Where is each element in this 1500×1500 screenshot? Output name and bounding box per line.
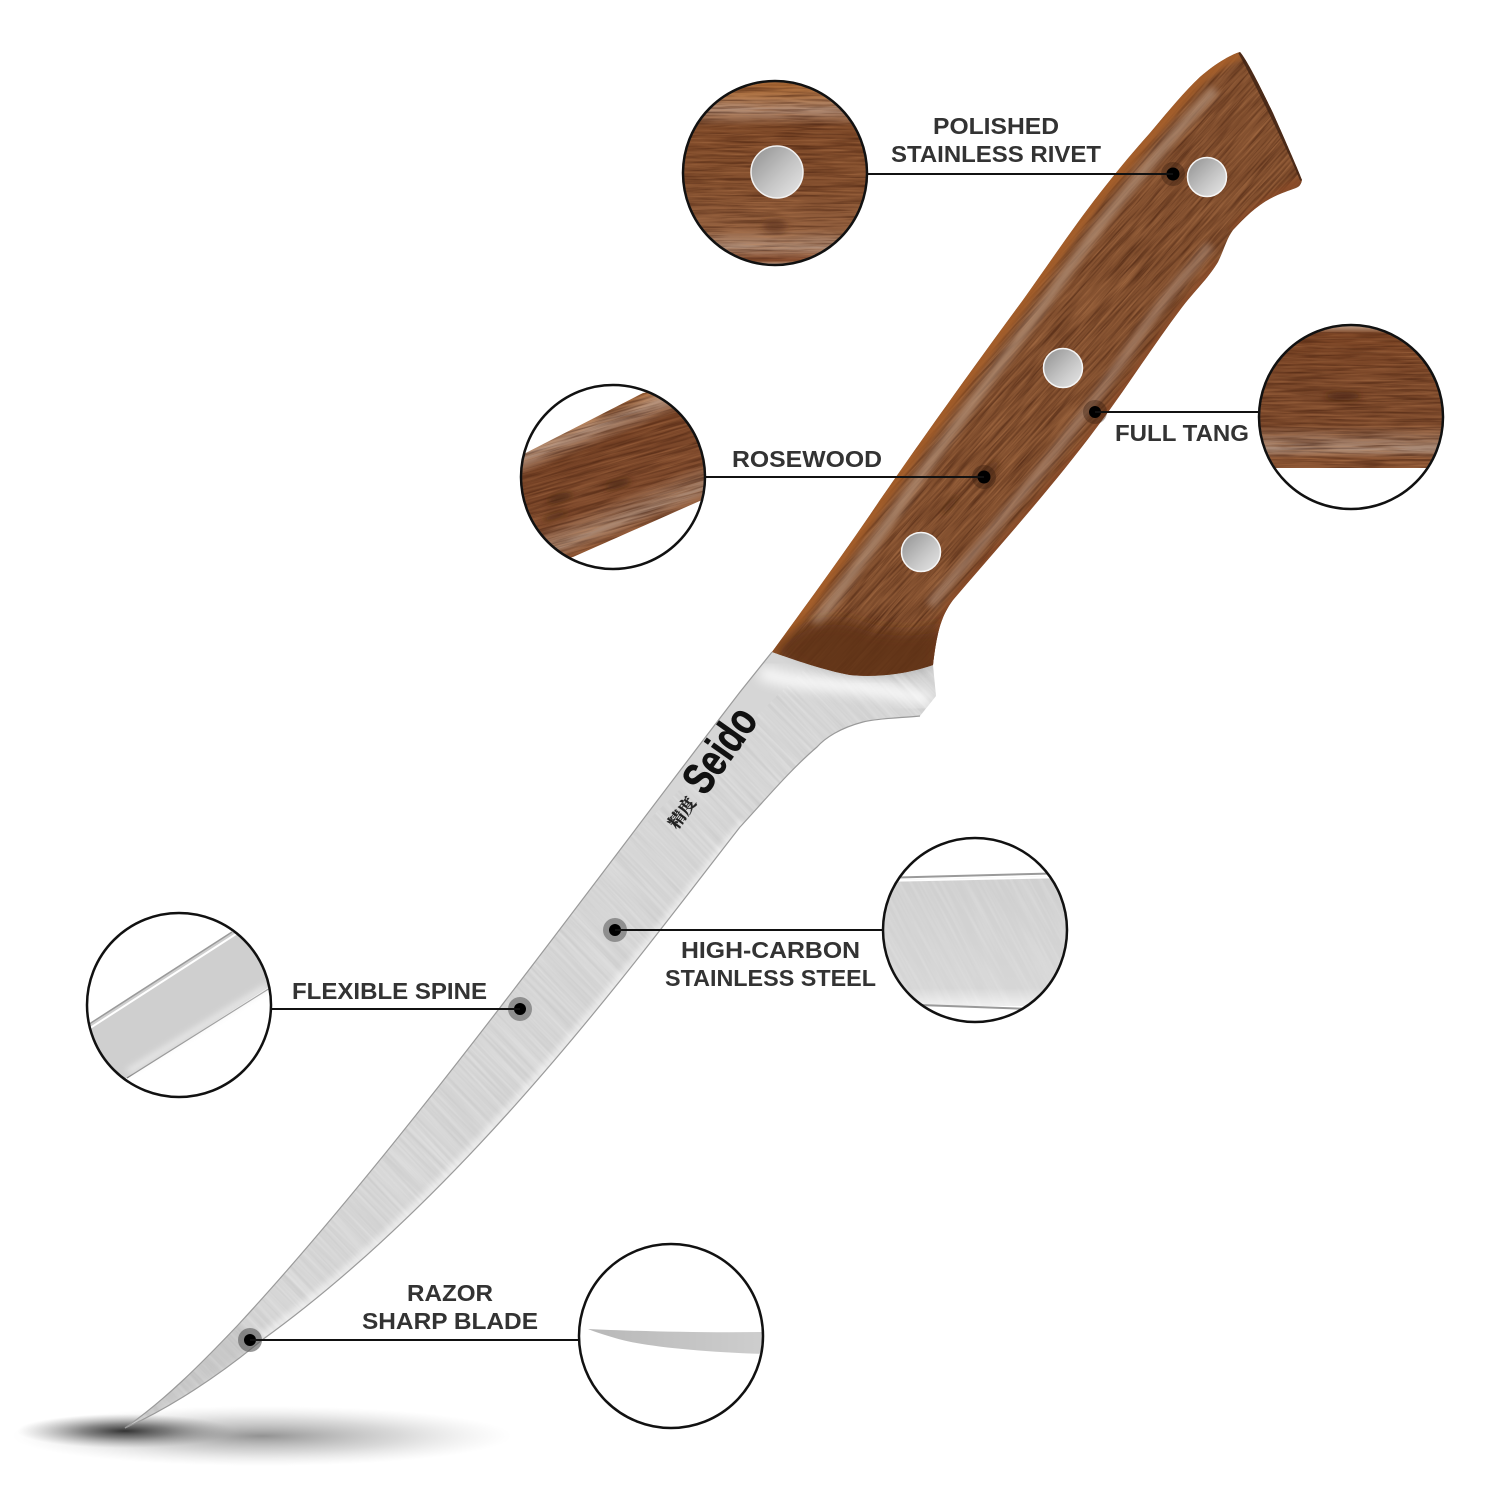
leader line and marker — [868, 162, 1185, 186]
rivet bottom — [902, 532, 940, 572]
detail circle — [579, 1244, 765, 1428]
leader line and marker — [706, 465, 996, 489]
callout: razor sharp blade — [238, 1244, 765, 1428]
brand logo: Seido — [672, 697, 767, 803]
label — [362, 1280, 538, 1334]
label: FULL TANG — [1115, 420, 1249, 446]
handle — [772, 52, 1302, 676]
leader line and marker — [603, 918, 885, 942]
brand logo — [661, 697, 767, 833]
label: STAINLESS STEEL — [665, 965, 876, 991]
detail circle — [680, 80, 870, 266]
rivet middle — [1044, 348, 1082, 388]
label: POLISHED — [933, 113, 1059, 139]
blade — [124, 652, 936, 1428]
label: RAZOR — [407, 1280, 493, 1306]
detail circle — [80, 913, 280, 1097]
label: ROSEWOOD — [732, 446, 882, 472]
leader line and marker — [1083, 400, 1260, 424]
detail circle — [520, 384, 706, 570]
label — [891, 113, 1102, 167]
label: SHARP BLADE — [362, 1308, 538, 1334]
callout: polished stainless rivet — [680, 80, 1185, 266]
label — [665, 937, 876, 991]
detail circle — [882, 836, 1068, 1024]
leader line and marker — [238, 1328, 580, 1352]
detail circle — [1255, 325, 1450, 509]
label: FLEXIBLE SPINE — [292, 978, 487, 1004]
ground shadow under knife tip — [12, 1406, 512, 1466]
callout: rosewood — [520, 384, 996, 570]
callout: high-carbon stainless steel — [603, 836, 1068, 1024]
callout: full tang — [1083, 325, 1450, 509]
callout: flexible spine — [80, 913, 532, 1097]
rivet top — [1188, 158, 1226, 196]
leader line and marker — [272, 997, 532, 1021]
label: STAINLESS RIVET — [891, 141, 1102, 167]
label: HIGH-CARBON — [681, 937, 860, 963]
brand logo: 精度 — [661, 791, 701, 833]
